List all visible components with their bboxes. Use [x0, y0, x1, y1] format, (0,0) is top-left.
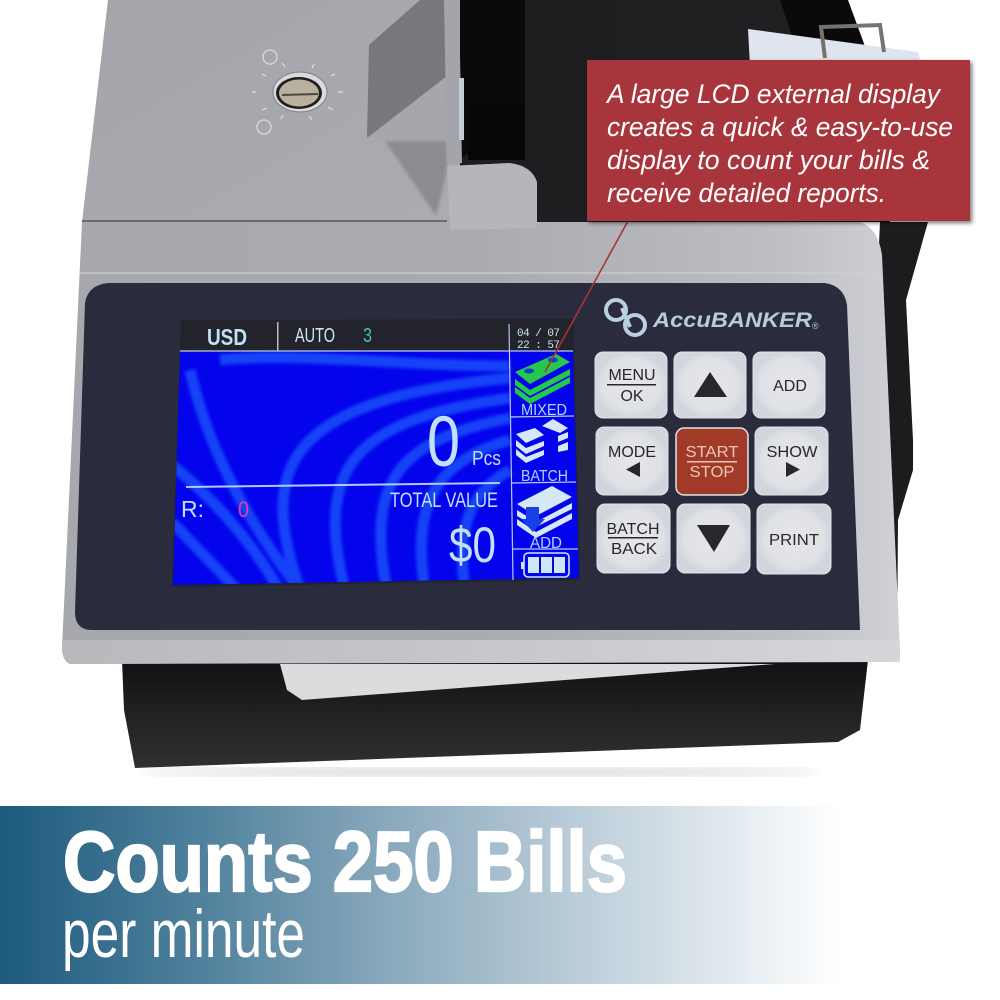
- key: down arrow: [677, 504, 750, 573]
- piece count: [427, 403, 501, 482]
- lower black body: [122, 660, 868, 768]
- key: MENU/OK: OK: [620, 388, 644, 405]
- logo rings: [606, 300, 645, 335]
- bezel lower lip: [62, 640, 900, 664]
- key: PRINT: [757, 504, 831, 574]
- key: BATCH/BACK: [597, 504, 670, 573]
- banner subheading: per minute: [62, 896, 305, 972]
- key: BATCH/BACK: BACK: [611, 541, 657, 558]
- label: MIXED: MIXED: [521, 402, 567, 419]
- label: ADD: ADD: [530, 535, 562, 552]
- total value: TOTAL VALUE: [390, 489, 498, 512]
- reject count: R:: [181, 496, 204, 522]
- key: ADD: ADD: [773, 378, 807, 395]
- key: MENU/OK: [595, 352, 667, 418]
- lid seam: [82, 220, 447, 222]
- callout background: [587, 60, 970, 221]
- callout text: [605, 79, 953, 208]
- machine photo: [62, 0, 928, 776]
- key: PRINT: PRINT: [769, 532, 819, 549]
- callout leader line: [545, 221, 628, 372]
- guide foot block: [447, 163, 537, 230]
- key: SHOW: [755, 427, 828, 495]
- callout text: display to count your bills &: [607, 145, 930, 175]
- reject count: 0: [238, 497, 249, 522]
- silver top lid: [82, 0, 460, 222]
- icon: mixed bills (green): [515, 354, 570, 404]
- LCD screen: [172, 322, 579, 595]
- screen divider lines: [180, 324, 578, 580]
- key: START/STOP: STOP: [690, 464, 734, 481]
- top status bar text: 22 : 57: [517, 340, 560, 352]
- lever guide wedge: [367, 0, 464, 216]
- key: MODE: [596, 427, 668, 495]
- piece count: 0: [427, 403, 460, 482]
- total value: $0: [449, 517, 496, 573]
- banner headline: Counts 250 Bills: [63, 815, 627, 910]
- top status bar text: [207, 322, 560, 352]
- top status bar text: 04 / 07: [517, 328, 560, 340]
- screen wave pattern: [172, 358, 510, 595]
- dial screw: [252, 50, 343, 134]
- silver panel bezel: [62, 222, 900, 664]
- top status bar text: 3: [363, 325, 372, 347]
- piece count: Pcs: [472, 448, 501, 470]
- blue screen background: [173, 351, 579, 585]
- icon: batch stacks: [516, 419, 568, 463]
- key: MENU/OK: MENU: [608, 367, 656, 384]
- brand logo: [606, 300, 819, 335]
- key: START/STOP: START: [686, 444, 739, 461]
- registered mark: ®: [812, 321, 819, 331]
- callout text: creates a quick & easy-to-use: [607, 112, 953, 142]
- top status bar text: AUTO: [295, 325, 335, 347]
- keypad: [595, 352, 831, 574]
- key: BATCH/BACK: BATCH: [606, 521, 660, 538]
- logo wordmark: AccuBANKER: [652, 308, 813, 332]
- bottom banner: [0, 806, 1000, 984]
- label: BATCH: BATCH: [521, 468, 568, 485]
- back cavity of the counter: [450, 0, 890, 222]
- callout text: A large LCD external display: [605, 79, 942, 109]
- bezel groove: [80, 272, 882, 274]
- key: up arrow: [674, 352, 746, 418]
- icon: battery: [521, 553, 569, 577]
- top status bar text: USD: [207, 324, 247, 350]
- icon: add bills: [517, 486, 572, 538]
- key: ADD: [753, 352, 825, 418]
- key: MODE: MODE: [608, 444, 656, 461]
- soft floor shadow: [140, 768, 820, 776]
- reject count: [181, 496, 249, 522]
- total value: [390, 489, 498, 573]
- callout box: [587, 60, 970, 221]
- callout text: receive detailed reports.: [607, 178, 886, 208]
- dark control panel: [75, 283, 860, 630]
- key: SHOW: SHOW: [766, 444, 818, 461]
- paper tray: [280, 664, 775, 700]
- display surround: [172, 319, 580, 587]
- white rear card and metal clip: [748, 25, 922, 66]
- banner gradient band: [0, 806, 1000, 984]
- key: START/STOP: [676, 428, 748, 495]
- right dark side rail: [860, 222, 928, 660]
